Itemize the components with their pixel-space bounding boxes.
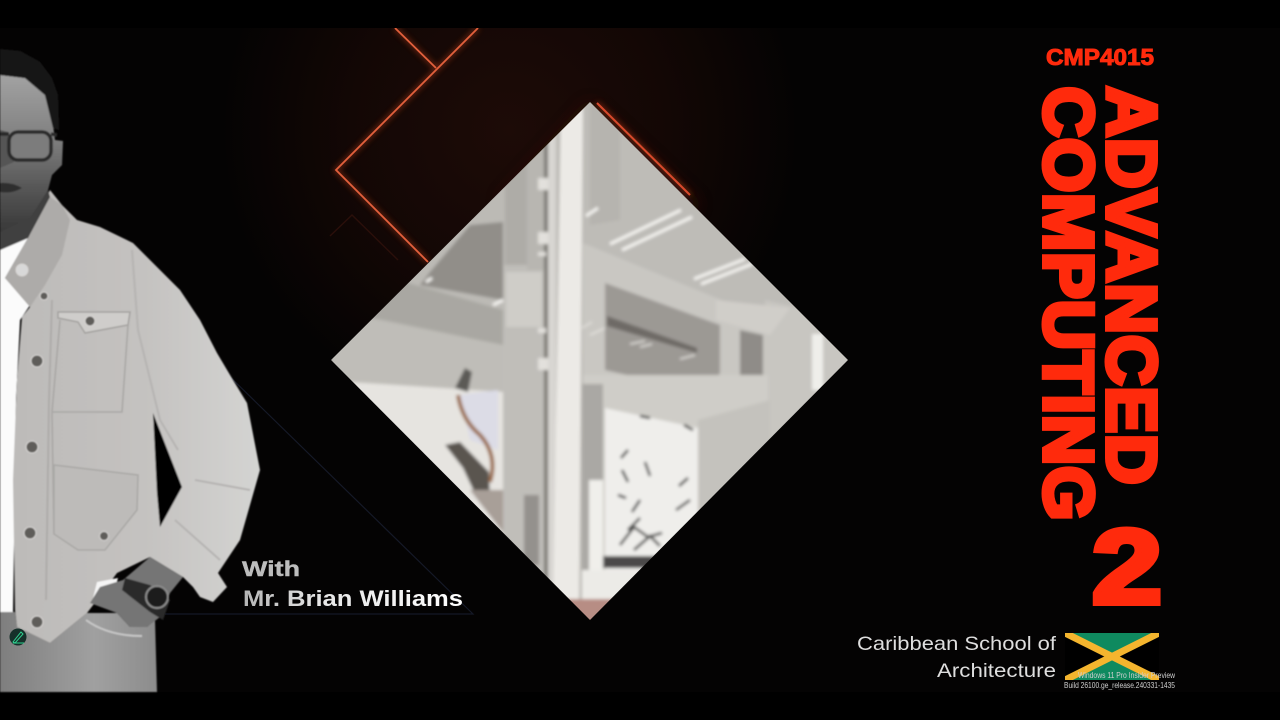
right wall blur xyxy=(698,400,770,540)
school line two: Architecture xyxy=(937,660,1056,682)
course code: CMP4015 xyxy=(1046,44,1154,70)
neck xyxy=(0,190,50,250)
icon: jamaican flag xyxy=(1065,633,1159,680)
jacket xyxy=(5,190,260,643)
panel: diamond building photo xyxy=(330,100,850,622)
jeans xyxy=(0,612,157,692)
neon lines xyxy=(336,28,478,262)
pink floor xyxy=(550,599,640,622)
presenter figure xyxy=(0,49,260,692)
jacket buttons xyxy=(16,264,108,628)
decorative triangle outline xyxy=(165,372,473,614)
lower wall xyxy=(602,373,766,480)
dark base under artwork xyxy=(603,556,658,568)
dark recess left xyxy=(420,222,503,300)
chest pocket xyxy=(58,312,130,333)
artwork marks xyxy=(618,416,693,550)
panel: glowing neon frame xyxy=(256,28,764,332)
upper column xyxy=(528,162,542,263)
shirt visible at waist xyxy=(92,578,118,602)
hand and forearm xyxy=(90,557,183,627)
dark slot xyxy=(544,100,548,620)
far right wall xyxy=(766,302,848,438)
sculpture panel xyxy=(445,442,490,500)
upper right ceiling xyxy=(583,100,850,340)
school name xyxy=(857,633,1057,682)
windows watermark xyxy=(1064,671,1175,690)
window dark stripe xyxy=(607,316,697,353)
ceiling lights xyxy=(426,208,752,305)
sculpture dark top xyxy=(455,368,472,392)
far right white post xyxy=(812,334,823,390)
clips on column xyxy=(538,178,548,370)
upper left ceiling xyxy=(505,166,526,264)
white base xyxy=(582,570,672,600)
hair xyxy=(0,49,59,130)
with label: With xyxy=(242,558,300,581)
nose shadow xyxy=(0,130,14,168)
pocket body lines xyxy=(52,320,128,534)
title line: advanced: ADVANCED xyxy=(1092,86,1170,484)
glow above diamond xyxy=(564,104,698,208)
sculpture ribbon xyxy=(458,395,492,482)
right beam xyxy=(584,245,752,374)
title line: computing: COMPUTING xyxy=(1030,86,1108,520)
dim background lines xyxy=(330,215,398,260)
window light reflections xyxy=(582,322,695,359)
lower shaded window xyxy=(470,490,505,535)
watch face xyxy=(146,586,168,608)
jacket placket shadow xyxy=(46,300,52,600)
jeans pocket stitching xyxy=(86,620,142,636)
white post lower xyxy=(589,480,603,590)
glasses xyxy=(0,132,57,160)
icon: pen badge xyxy=(10,628,26,646)
far right beam xyxy=(726,302,768,320)
lower pocket shading xyxy=(54,465,138,550)
recessed window xyxy=(604,282,722,376)
gap between arm and body xyxy=(153,413,182,527)
main white column xyxy=(553,100,583,620)
neon glow xyxy=(336,28,690,262)
band under left beam xyxy=(331,312,503,392)
left window xyxy=(352,381,504,534)
left beam xyxy=(374,283,503,344)
left column bright block xyxy=(506,272,542,327)
lower left shaded column xyxy=(524,495,539,565)
presenter name xyxy=(242,558,463,611)
full name: Mr. Brian Williams xyxy=(243,586,463,611)
marble artwork xyxy=(605,408,698,570)
gray post xyxy=(582,384,603,570)
mouth xyxy=(0,183,22,192)
collar xyxy=(5,197,70,307)
ceiling darker upper patch xyxy=(592,204,602,218)
dark ember wash behind frame xyxy=(256,28,764,332)
sleeve crease xyxy=(132,250,250,560)
photo base xyxy=(331,126,591,620)
face xyxy=(0,75,63,232)
watch strap xyxy=(122,578,170,620)
title number: 2 xyxy=(1092,509,1162,626)
white shirt xyxy=(0,238,30,612)
dark side panel xyxy=(740,330,763,388)
paper behind sculpture xyxy=(460,390,498,450)
neon line on diamond edge xyxy=(597,103,690,195)
thin strip xyxy=(548,100,556,620)
school line one: Caribbean School of xyxy=(857,633,1057,655)
left column xyxy=(502,392,506,532)
watermark line one: Windows 11 Pro Insider Preview xyxy=(1078,671,1175,680)
watermark line two: Build 26100.ge_release.240331-1435 xyxy=(1064,681,1175,690)
